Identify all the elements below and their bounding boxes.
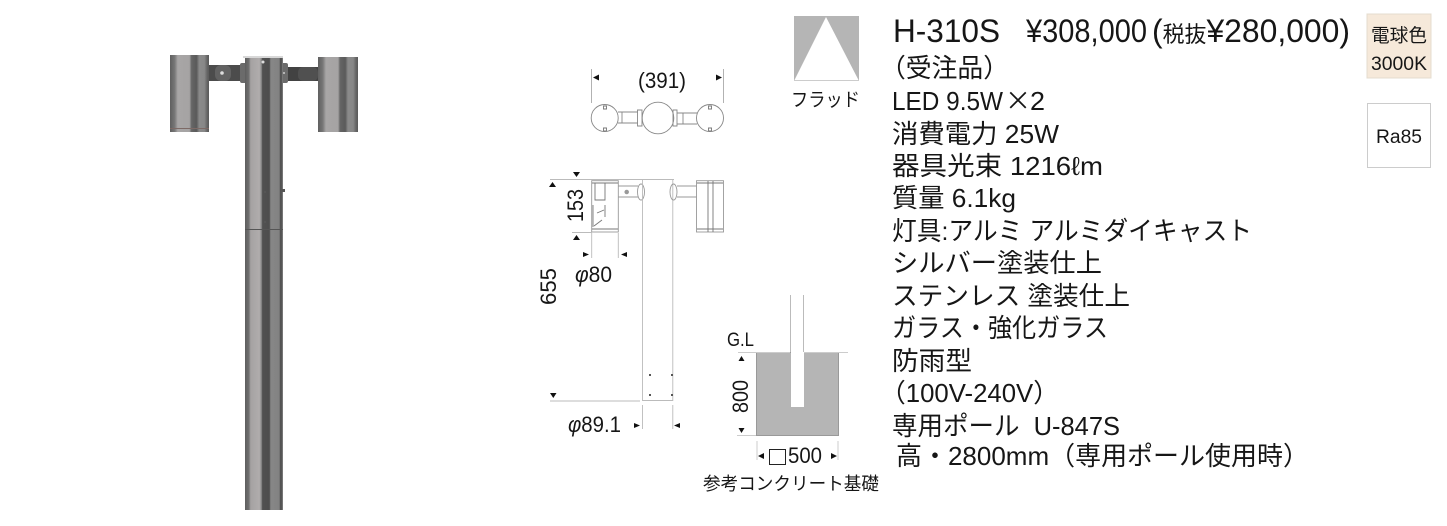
left lamp arm: [209, 63, 248, 83]
badge background: [1367, 14, 1431, 78]
top view drawing: [591, 69, 724, 134]
left head outline: [592, 181, 618, 232]
label: flood: フラッド: [791, 90, 860, 111]
center pole outline: [640, 180, 674, 400]
left arm: [618, 186, 638, 197]
center pole circle: [642, 102, 674, 134]
right lamp arm: [281, 63, 319, 83]
dimension: 153: 153: [563, 189, 588, 222]
left head circle: [591, 104, 618, 132]
material line 1: 灯具:アルミ アルミダイキャスト: [892, 216, 1252, 246]
badge text: bulb colour: 電球色: [1371, 25, 1427, 46]
pole top bolt: [262, 60, 264, 64]
left lamp head: [170, 55, 209, 132]
rainproof: 防雨型: [892, 346, 972, 376]
luminous flux: 器具光束 1216ℓm: [892, 151, 1103, 181]
dimension arrows: width: [593, 74, 722, 80]
badge text: 3000K: 3000K: [1371, 53, 1427, 75]
model name: H-310S: [893, 13, 1000, 49]
badge outline: [1368, 104, 1430, 168]
LED count: 2: [1030, 86, 1045, 116]
dimension: 655: 655: [536, 268, 561, 305]
caption: reference concrete foundation: 参考コンクリート基礎: [703, 474, 879, 494]
ground line: [737, 352, 848, 460]
icon base line: [794, 80, 859, 81]
side view drawing: [550, 180, 724, 429]
extension lines: [550, 180, 673, 429]
material line 2: シルバー塗装仕上: [892, 248, 1102, 278]
pole edges: [790, 295, 804, 352]
foundation arrows: [738, 356, 837, 459]
pole in foundation: [791, 295, 804, 407]
LED times: ×: [1005, 81, 1031, 118]
right head outline: [696, 181, 724, 232]
price: ¥308,000: [1025, 13, 1147, 49]
right lamp head: [318, 57, 358, 132]
pole: [245, 57, 283, 510]
right head circle: [696, 104, 724, 132]
light distribution icon: [794, 16, 859, 81]
dimension: φ80: φ80: [575, 262, 612, 287]
icon background: [794, 16, 859, 81]
square symbol: [770, 450, 786, 464]
dimension: 500: 500: [788, 443, 822, 468]
right collar: [670, 184, 677, 200]
mass: 質量 6.1kg: [892, 183, 1016, 213]
concrete foundation drawing: [737, 295, 848, 464]
badge: colour rendering: [1368, 104, 1430, 168]
pole cap: [243, 56, 283, 58]
pole screws: [264, 189, 285, 223]
label: G.L: G.L: [727, 330, 754, 351]
material line 3: ステンレス 塗装仕上: [892, 281, 1130, 311]
dedicated pole: 専用ポール U-847S: [892, 411, 1120, 441]
head inner detail: [592, 181, 723, 232]
product photo: twin-head pole light: [170, 55, 358, 510]
badge: color temperature: [1367, 14, 1431, 78]
pole base bolts: [649, 374, 673, 396]
icon beam: [794, 17, 859, 81]
left collar: [638, 184, 644, 200]
width dimension lines: [592, 69, 724, 103]
height: 高・2800mm（専用ポール使用時）: [896, 441, 1309, 471]
built to order: （受注品）: [880, 53, 1009, 83]
dimension: 800: 800: [728, 380, 753, 413]
LED: LED 9.5W: [892, 86, 1003, 116]
dimension: (391): (391): [638, 68, 686, 93]
arm bolt: [625, 190, 628, 194]
specification text: [880, 13, 1350, 471]
voltage: （100V-240V）: [880, 378, 1059, 408]
material line 4: ガラス・強化ガラス: [892, 313, 1108, 343]
dimension: φ89.1: φ89.1: [568, 412, 621, 437]
price excluding tax: (税抜¥280,000): [1152, 13, 1350, 49]
concrete block: [756, 352, 838, 436]
head bolts: [604, 106, 712, 131]
right arm: [677, 186, 697, 197]
connecting arms: [618, 110, 697, 126]
pole joint: [245, 229, 283, 230]
badge text: Ra85: Ra85: [1376, 127, 1422, 148]
side view arrows: [549, 172, 680, 428]
power consumption: 消費電力 25W: [892, 119, 1059, 149]
